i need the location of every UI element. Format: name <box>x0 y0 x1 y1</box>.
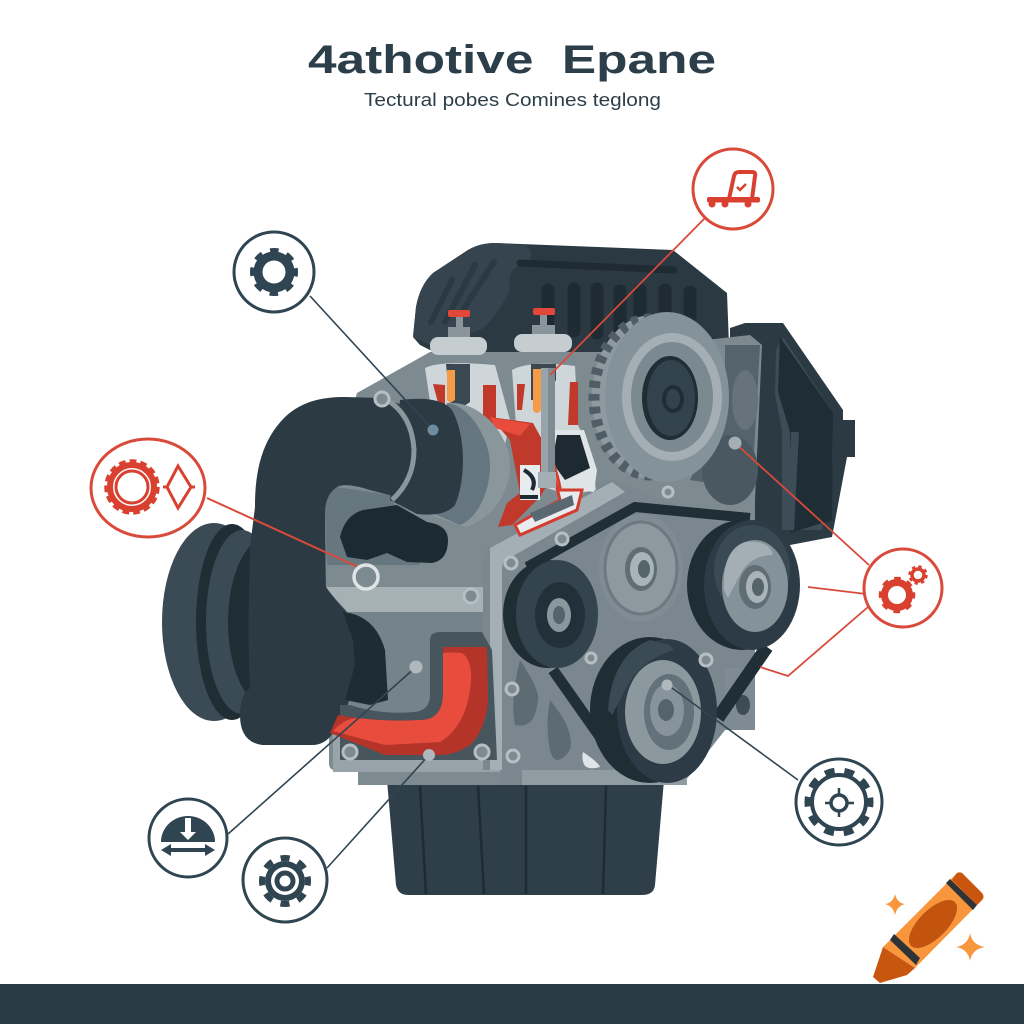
right pulley <box>687 520 800 650</box>
right bracket <box>720 323 855 545</box>
intake hose <box>240 397 463 745</box>
callout: gear with ring <box>243 749 435 922</box>
bottom crank pulley <box>590 637 717 783</box>
left pulley <box>503 560 598 668</box>
engine illustration <box>162 243 855 895</box>
callout: dark gear top-left <box>234 232 438 436</box>
footer bar <box>0 984 1024 1024</box>
drive belt <box>527 507 767 765</box>
bolts <box>343 392 712 762</box>
valve towers and cutaway <box>425 308 597 535</box>
callout: red double gears <box>728 436 942 676</box>
turbo housing collar <box>425 403 510 527</box>
title: 4athotive Epane <box>308 38 716 82</box>
back idler pulley <box>599 514 683 622</box>
subtitle: Tectural pobes Comines teglong <box>364 90 661 110</box>
callout: gauge icon <box>149 660 422 877</box>
callout: red gear and diamond <box>91 439 378 589</box>
icon: crayon <box>873 872 985 983</box>
engine block <box>325 335 762 785</box>
valve cover <box>413 243 729 360</box>
callout: gear with crosshair <box>662 680 882 845</box>
toothed timing gear <box>592 312 729 482</box>
callout: red cart <box>550 149 773 375</box>
oil pan <box>387 780 664 895</box>
left flywheel disc <box>162 523 308 721</box>
red coolant pipe <box>330 632 497 760</box>
